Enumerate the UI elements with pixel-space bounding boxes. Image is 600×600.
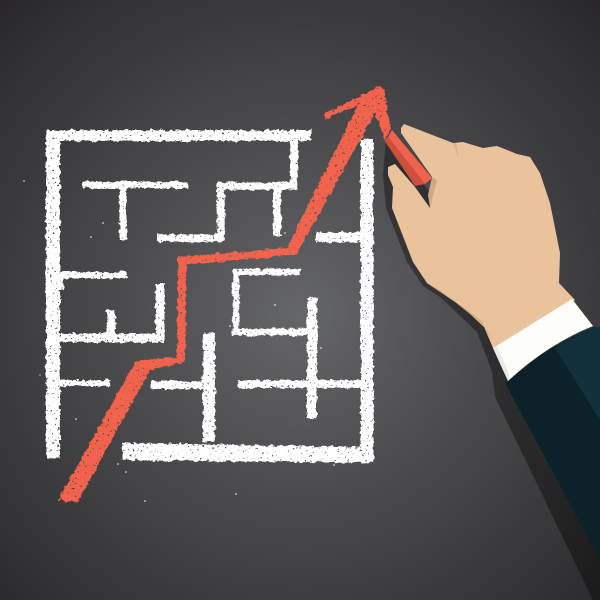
finger crease [453,143,459,160]
lower middle horizontal wall [151,381,205,389]
cuff shading [493,346,509,381]
arrow shaft and head [58,86,391,503]
left middle room wall [58,284,160,338]
hand holding chalk [384,124,575,360]
left middle wall [52,275,127,290]
right stub wall [316,232,364,242]
lower right horizontal wall [238,380,362,388]
central room wall [236,272,312,332]
red chalk growth arrow [58,86,391,503]
right vertical wall [307,297,317,418]
lower hand shading [427,283,493,348]
sleeve [493,299,600,560]
jacket sleeve [505,327,600,560]
lower left horizontal wall [58,380,110,386]
chalk stick shaded face [384,137,425,186]
finger shading [428,177,437,208]
small stub wall [107,310,115,336]
central vertical wall [203,333,215,442]
chalk maze [46,130,373,463]
hand [388,124,575,360]
maze outer bottom wall [122,443,373,463]
upper stub wall [273,186,281,236]
chalk stick bright face [388,130,432,184]
maze outer right wall [360,139,374,460]
sleeve lighter panel [555,327,600,420]
upper T wall [82,185,188,240]
hand and sleeve shadow [383,138,600,600]
chalk speckles [23,180,335,502]
maze outer left wall [46,130,60,458]
upper right corridor wall [157,140,294,238]
shirt cuff [493,299,593,381]
maze outer top wall [46,130,311,141]
